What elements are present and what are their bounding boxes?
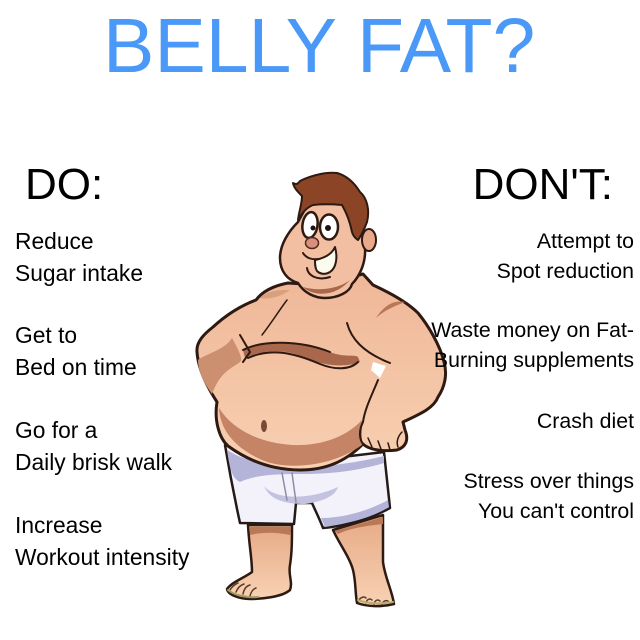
do: reduce sugar: Reduce (15, 228, 94, 254)
heading: do: DO: (25, 160, 103, 209)
do: brisk walk: Daily brisk walk (15, 449, 172, 475)
do: brisk walk: Go for a (15, 417, 97, 443)
don't: stress (464, 469, 634, 523)
eyes (301, 211, 319, 239)
title: BELLY FAT? (103, 3, 535, 89)
do: bed on time: Get to (15, 322, 77, 348)
left leg (227, 525, 292, 599)
don't: fat-burning supplements (431, 318, 634, 372)
belly shadow (219, 408, 362, 466)
white shorts (225, 445, 390, 528)
do: bed on time: Bed on time (15, 354, 137, 380)
do: bed on time (15, 322, 137, 380)
do: workout intensity: Workout intensity (15, 544, 189, 570)
fist knuckles (368, 432, 402, 450)
white gap by arm (371, 362, 386, 378)
don't: spot reduction (497, 229, 634, 283)
don't: stress: Stress over things (464, 469, 634, 493)
don't: spot reduction: Spot reduction (497, 259, 634, 283)
left arm shadow (198, 338, 241, 394)
ear (362, 229, 376, 251)
right leg (333, 515, 394, 606)
nose (306, 238, 318, 248)
heading: don't: DON'T: (473, 160, 613, 209)
smile (315, 247, 336, 274)
don't: fat-burning supplements: Burning supplements (434, 348, 634, 372)
do: workout intensity: Increase (15, 512, 102, 538)
navel (261, 420, 267, 432)
head (280, 173, 376, 298)
don't: crash diet: Crash diet (537, 409, 634, 433)
chest fold (243, 343, 360, 365)
don't: spot reduction: Attempt to (537, 229, 634, 253)
do: workout intensity (15, 512, 190, 570)
do: reduce sugar (15, 228, 143, 286)
inner right arm (347, 323, 390, 363)
don't: stress: You can't control (478, 499, 634, 523)
torso, belly and arms (197, 274, 446, 470)
hair (293, 173, 368, 240)
do: reduce sugar: Sugar intake (15, 260, 143, 286)
do: brisk walk (15, 417, 172, 475)
don't: fat-burning supplements: Waste money on Fat- (431, 318, 634, 342)
